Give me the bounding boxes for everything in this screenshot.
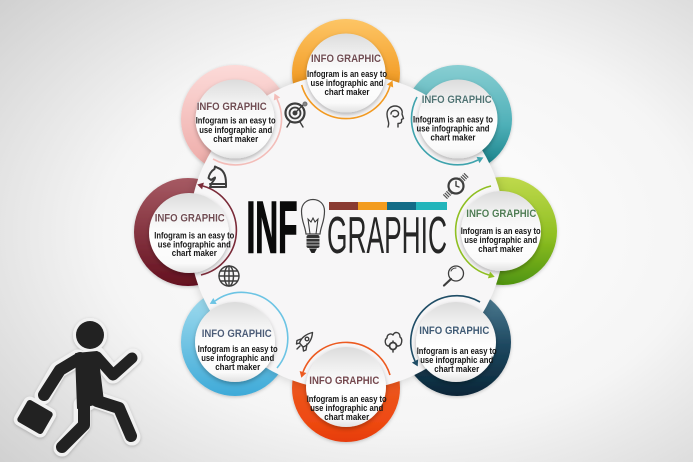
central logo: GRAPHIC [327, 207, 447, 265]
panel: pink step: chart maker [213, 134, 259, 144]
icon: wristwatch [444, 174, 467, 198]
icon: running businessman [16, 321, 133, 448]
panel: pink step: Infogram is an easy to [196, 116, 276, 126]
panel: red step [298, 342, 390, 427]
panel: green step: INFO GRAPHIC [466, 208, 536, 220]
panel: light blue step: chart maker [215, 362, 261, 372]
panel: light blue step: use infographic and [201, 353, 274, 363]
panel: red step: chart maker [324, 412, 370, 422]
panel: dark blue step: chart maker [434, 364, 480, 374]
panel: red step: INFO GRAPHIC [309, 375, 379, 387]
panel: light blue step [195, 292, 288, 382]
ring: maroon [134, 178, 242, 286]
icon: rocket [296, 332, 312, 351]
panel: light blue step: Infogram is an easy to [198, 344, 278, 354]
ring: pink [181, 65, 289, 173]
central circle [189, 74, 505, 390]
panel: teal step: use infographic and [416, 124, 490, 134]
central logo [246, 188, 447, 268]
panel: pink step [196, 80, 282, 165]
panel: maroon step: chart maker [172, 248, 217, 258]
panel: red step: Infogram is an easy to [307, 394, 387, 404]
icon: globe [219, 266, 239, 286]
panel: orange step: use infographic and [310, 78, 384, 88]
ring: light blue [181, 288, 289, 396]
icon: target [286, 102, 307, 127]
panel: orange step: INFO GRAPHIC [311, 53, 381, 65]
panel: green step: chart maker [478, 244, 524, 254]
panel: dark blue step: INFO GRAPHIC [419, 325, 489, 337]
panel: dark blue step: use infographic and [420, 355, 493, 365]
panel: red step: use infographic and [310, 403, 383, 413]
icon: cloud with gear [385, 333, 402, 352]
panel: maroon step: Infogram is an easy to [154, 231, 235, 241]
panel: light blue step: INFO GRAPHIC [202, 328, 272, 340]
ring: teal [404, 65, 512, 173]
panel: orange step: Infogram is an easy to [307, 69, 388, 79]
panel: maroon step [149, 181, 236, 275]
panel: pink step: INFO GRAPHIC [197, 101, 267, 113]
panel: green step: use infographic and [464, 235, 537, 245]
panel: green step: Infogram is an easy to [461, 226, 541, 236]
central logo: INF [246, 188, 298, 268]
panel: maroon step: INFO GRAPHIC [155, 213, 225, 225]
icon: chess knight [208, 166, 226, 187]
panel: orange step [302, 34, 396, 119]
ring: red [292, 334, 400, 442]
panel: maroon step: use infographic and [158, 239, 231, 249]
ring: orange [292, 19, 400, 127]
panel: teal step: chart maker [430, 133, 476, 143]
panel: orange step: chart maker [324, 87, 370, 97]
ring: green [449, 177, 557, 285]
panel: teal step [411, 80, 498, 165]
panel: teal step: Infogram is an easy to [413, 115, 494, 125]
panel: green step [456, 186, 541, 280]
panel: dark blue step [411, 296, 497, 382]
icon: head with brain [387, 106, 404, 127]
panel: dark blue step: Infogram is an easy to [417, 346, 497, 356]
icon: magnifier [444, 266, 464, 286]
ring: dark blue [403, 288, 511, 396]
panel: teal step: INFO GRAPHIC [422, 94, 492, 106]
panel: pink step: use infographic and [199, 125, 272, 135]
